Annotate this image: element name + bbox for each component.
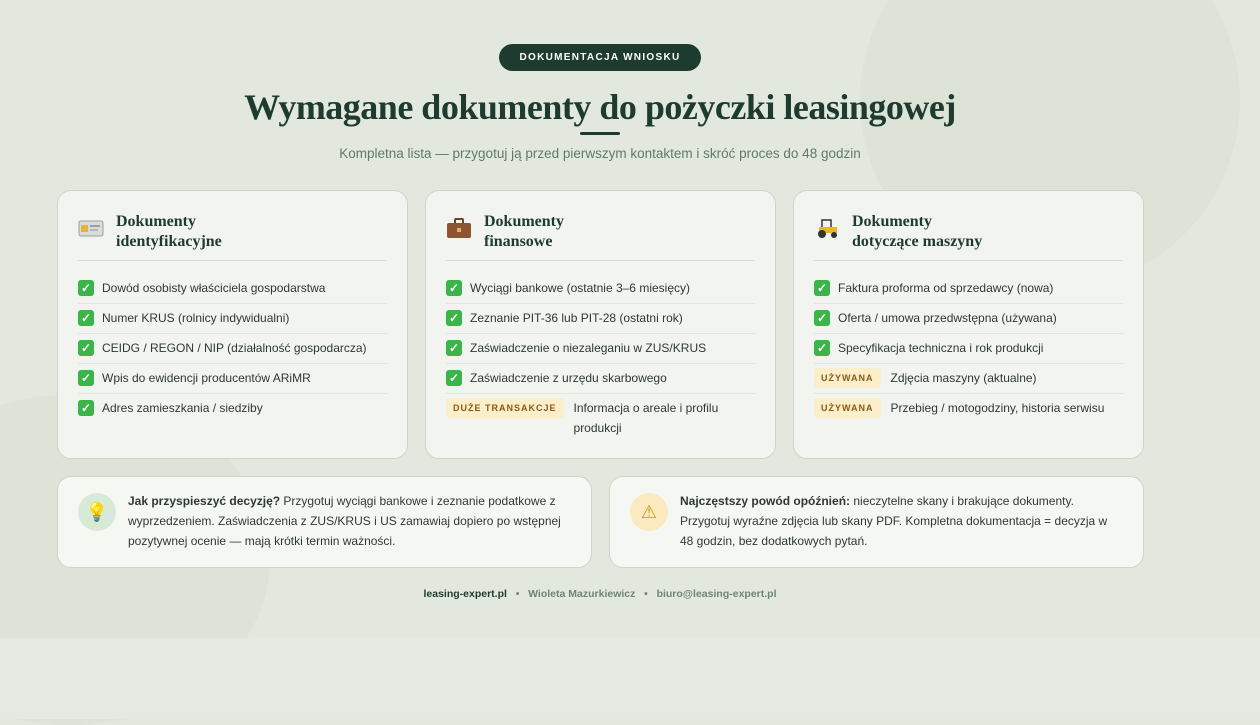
panel: machine documents: UŻYWANA xyxy=(821,373,874,383)
panel: identification documents: Wpis do ewidencji producentów ARiMR xyxy=(102,371,311,385)
panel: financial documents: Zaświadczenie o niezaleganiu w ZUS/KRUS xyxy=(470,341,706,355)
subtitle: Kompletna lista — przygotuj ją przed pierwszym kontaktem i skróć proces do 48 godzin xyxy=(339,146,861,161)
panel: identification documents: ✓ xyxy=(81,311,91,325)
callout: warning xyxy=(609,476,1144,568)
panel: machine documents: Oferta / umowa przedwstępna (używana) xyxy=(838,311,1057,325)
panel: identification documents: ✓ xyxy=(81,281,91,295)
heading: identification: identyfikacyjne xyxy=(116,233,222,250)
panel: identification documents: Numer KRUS (rolnicy indywidualni) xyxy=(102,311,289,325)
panel: identification documents: ✓ xyxy=(81,371,91,385)
panel: financial documents: ✓ xyxy=(449,341,459,355)
heading: machine xyxy=(814,211,1123,261)
panel: identification documents: Adres zamieszkania / siedziby xyxy=(102,401,263,415)
callout: tip xyxy=(57,476,592,568)
panel: machine documents: UŻYWANA xyxy=(821,403,874,413)
panel: financial documents xyxy=(425,190,776,459)
panel: financial documents: Zeznanie PIT-36 lub PIT-28 (ostatni rok) xyxy=(470,311,683,325)
heading: financial: Dokumenty xyxy=(484,213,564,230)
panel: machine documents: Specyfikacja techniczna i rok produkcji xyxy=(838,341,1043,355)
badge: DOKUMENTACJA WNIOSKU xyxy=(520,52,680,63)
heading: financial xyxy=(446,211,755,261)
panel: machine documents: Faktura proforma od sprzedawcy (nowa) xyxy=(838,281,1053,295)
panel: identification documents: CEIDG / REGON / NIP (działalność gospodarcza) xyxy=(102,341,367,355)
panel: machine documents: ✓ xyxy=(817,341,827,355)
panel: financial documents: Wyciągi bankowe (ostatnie 3–6 miesięcy) xyxy=(470,281,690,295)
panel: identification documents xyxy=(57,190,408,459)
panel: identification documents: Dowód osobisty właściciela gospodarstwa xyxy=(102,281,325,295)
panel: financial documents: produkcji xyxy=(574,421,622,435)
panel: machine documents: ✓ xyxy=(817,281,827,295)
heading: identification: Dokumenty xyxy=(116,213,196,230)
callout: warning: Najczęstszy powód opóźnień: nieczytelne skany i brakujące dokumenty. Przygotuj wyraźne zdjęcia lub skany PDF. Kompletna dokumentacja = decyzja w 48 godzin, bez dodatkowych pytań. xyxy=(680,494,1107,548)
callout: tip: Jak przyspieszyć decyzję? Przygotuj wyciągi bankowe i zeznanie podatkowe z wyprzedzeniem. Zaświadczenia z ZUS/KRUS i US zamawiaj dopiero po wstępnej pozytywnej ocenie — mają krótki termin ważności. xyxy=(128,494,561,548)
panel: machine documents: Zdjęcia maszyny (aktualne) xyxy=(890,371,1037,385)
panel: financial documents: ✓ xyxy=(449,311,459,325)
badge xyxy=(499,44,701,71)
heading: machine: dotyczące maszyny xyxy=(852,233,982,250)
panel: financial documents: ✓ xyxy=(449,281,459,295)
panel: identification documents: ✓ xyxy=(81,341,91,355)
icon: lightbulb xyxy=(78,493,116,531)
heading: financial: finansowe xyxy=(484,233,552,250)
panel: financial documents: Zaświadczenie z urzędu skarbowego xyxy=(470,371,667,385)
icon: warning: ⚠ xyxy=(641,502,657,522)
heading: machine: Dokumenty xyxy=(852,213,932,230)
panel: machine documents xyxy=(793,190,1144,459)
icon: warning xyxy=(630,493,668,531)
footer: leasing-expert.pl • Wioleta Mazurkiewicz • biuro@leasing-expert.pl xyxy=(423,588,776,600)
panel: machine documents: Przebieg / motogodziny, historia serwisu xyxy=(890,401,1104,415)
icon: lightbulb: 💡 xyxy=(86,502,108,522)
title: Wymagane dokumenty do pożyczki leasingowej xyxy=(244,87,956,127)
panel: identification documents: ✓ xyxy=(81,401,91,415)
heading: identification xyxy=(78,211,387,261)
panel: machine documents: ✓ xyxy=(817,311,827,325)
panel: financial documents: ✓ xyxy=(449,371,459,385)
panel: financial documents: DUŻE TRANSAKCJE xyxy=(453,403,557,413)
panel: financial documents: Informacja o areale i profilu xyxy=(574,401,718,415)
